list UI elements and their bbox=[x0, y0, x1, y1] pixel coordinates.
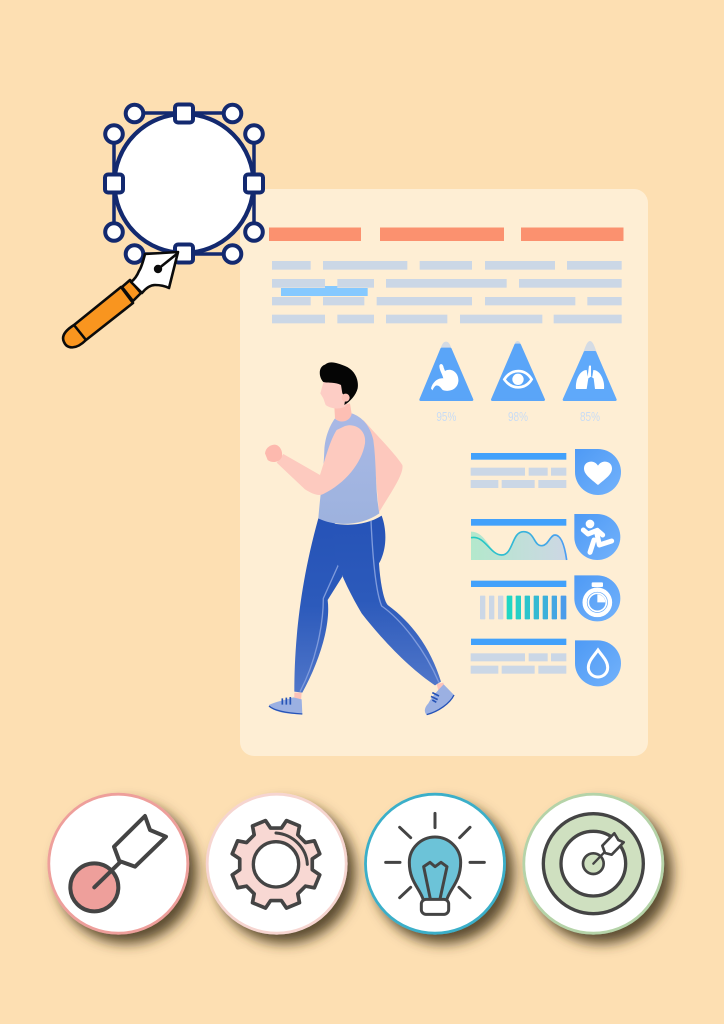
percentages bbox=[436, 409, 600, 424]
front arm bbox=[277, 425, 365, 495]
badge: gear bbox=[207, 794, 346, 933]
percentages: 95% bbox=[436, 409, 456, 424]
vector circle with bezier handles bbox=[105, 104, 263, 263]
badge: target bbox=[524, 794, 663, 933]
row: heart bbox=[471, 449, 621, 495]
stripe on back leg bbox=[300, 565, 338, 692]
back arm bbox=[363, 420, 403, 512]
fist bbox=[265, 445, 282, 462]
badge: pen tool bbox=[49, 794, 188, 933]
panel: document card bbox=[240, 189, 648, 756]
ankles bbox=[294, 683, 445, 701]
torso bbox=[318, 413, 379, 524]
row: level bars and stopwatch icon bbox=[471, 575, 620, 621]
front leg bbox=[332, 516, 441, 685]
percentages: 98% bbox=[508, 409, 528, 424]
triangle: stomach bbox=[421, 342, 472, 400]
header bars bbox=[269, 228, 624, 241]
text placeholder lines bbox=[272, 261, 622, 323]
triangle: eye bbox=[492, 341, 544, 400]
icon: pen tool bbox=[63, 252, 178, 347]
neck bbox=[334, 403, 352, 421]
row: water drop bbox=[471, 639, 621, 686]
ear bbox=[342, 394, 350, 402]
hair bbox=[320, 362, 358, 405]
triangle: lungs bbox=[564, 341, 615, 400]
percentages: 85% bbox=[580, 409, 600, 424]
back leg bbox=[294, 518, 342, 693]
badge: light bulb bbox=[366, 794, 504, 933]
runner figure bbox=[265, 362, 454, 715]
face bbox=[320, 380, 352, 408]
shoes bbox=[269, 697, 302, 714]
right column graphics bbox=[421, 341, 621, 686]
row: wave chart and runner icon bbox=[471, 514, 620, 560]
stripe on front leg bbox=[371, 521, 439, 683]
